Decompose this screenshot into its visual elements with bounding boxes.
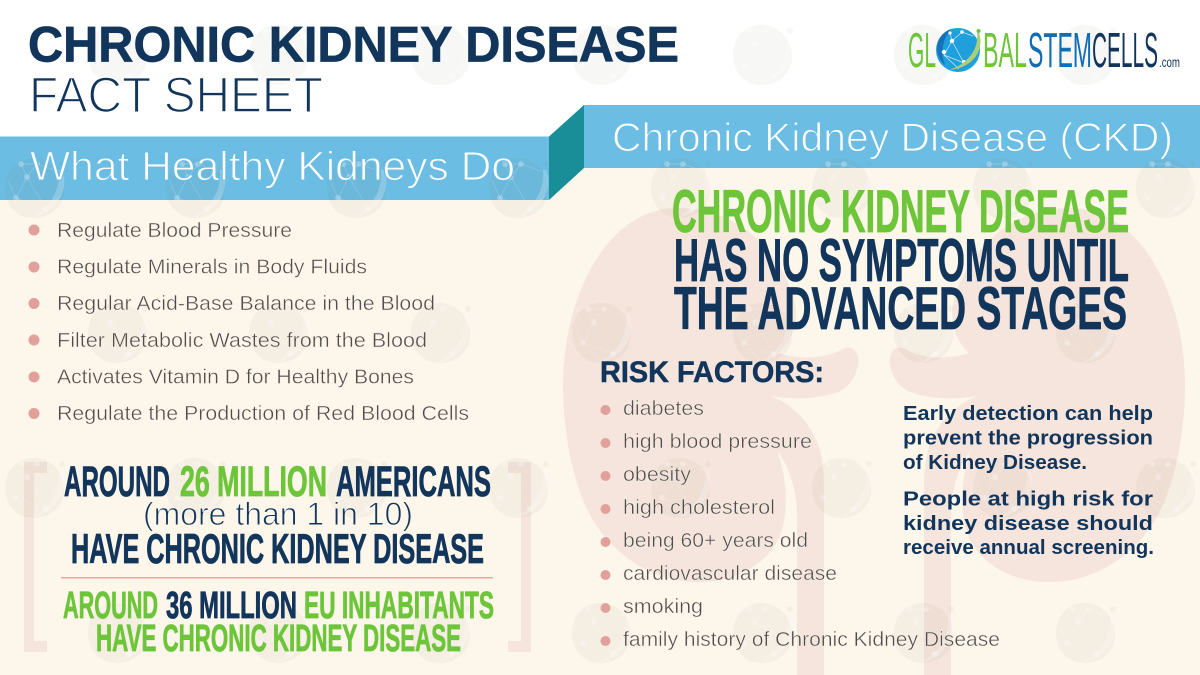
headline: no symptoms until advanced stages [672, 178, 1129, 342]
list: what healthy kidneys do: Regulate the Production of Red Blood Cells [57, 402, 469, 425]
kidney illustration background [563, 208, 1185, 675]
list: what healthy kidneys do: Activates Vitamin D for Healthy Bones [57, 366, 414, 388]
logo: Global Stem Cells: BAL [983, 24, 1027, 78]
ribbon band: What Healthy Kidneys Do [0, 136, 549, 200]
list: what healthy kidneys do: Regulate Blood Pressure [57, 219, 292, 242]
list: risk factors: diabetes [623, 397, 704, 420]
stat: 36 million EU inhabitants [63, 585, 494, 660]
logo: Global Stem Cells: GL [908, 24, 936, 78]
stat: 36 million EU inhabitants: EU INHABITANTS [304, 585, 494, 627]
callout: early detection: Early detection can help [903, 403, 1153, 425]
stat: 26 million Americans: (more than 1 in 10) [143, 496, 413, 532]
callout: annual screening [903, 488, 1154, 559]
background: cream page area below bands [0, 168, 1200, 675]
list: risk factors: smoking [623, 595, 703, 618]
list: what healthy kidneys do: Regular Acid-Base Balance in the Blood [57, 292, 435, 315]
heading: What Healthy Kidneys Do: What Healthy Kidneys Do [30, 143, 515, 189]
list: what healthy kidneys do [28, 219, 469, 425]
stat: 26 million Americans: AROUND [64, 458, 170, 506]
callout: annual screening: kidney disease should [903, 513, 1153, 535]
stats bracket: right [508, 462, 531, 652]
title: FACT SHEET [29, 67, 323, 123]
list: risk factors: family history of Chronic Kidney Disease [623, 628, 1000, 651]
list: what healthy kidneys do: Regulate Minerals in Body Fluids [57, 256, 367, 278]
stat: 26 million Americans: AMERICANS [336, 458, 491, 506]
title [28, 16, 679, 123]
logo: Global Stem Cells: .com [1159, 54, 1180, 70]
list: risk factors: high blood pressure [623, 430, 812, 453]
ribbon band: Chronic Kidney Disease [584, 105, 1200, 168]
callout: early detection: prevent the progression [903, 428, 1153, 450]
logo: Global Stem Cells [908, 24, 1180, 78]
heading: risk factors: RISK FACTORS: [600, 356, 824, 389]
list: what healthy kidneys do: Filter Metabolic Wastes from the Blood [57, 329, 427, 352]
list: risk factors: obesity [623, 463, 692, 486]
stat: 36 million EU inhabitants: HAVE CHRONIC KIDNEY DISEASE [96, 618, 461, 660]
list: risk factors: cardiovascular disease [623, 562, 837, 585]
callout: annual screening: receive annual screening. [903, 537, 1154, 559]
icon: logo globe [936, 28, 981, 72]
list: risk factors: being 60+ years old [623, 529, 808, 552]
stats bracket: left [24, 462, 47, 652]
callout: early detection: of Kidney Disease. [903, 452, 1087, 474]
stat: 26 million Americans: HAVE CHRONIC KIDNEY DISEASE [71, 525, 484, 572]
list: risk factors [600, 397, 1000, 651]
callout: annual screening: People at high risk for [903, 488, 1153, 510]
heading: Chronic Kidney Disease (CKD): Chronic Kidney Disease (CKD) [612, 116, 1173, 160]
stat: 26 million Americans [64, 458, 491, 572]
callout: early detection [903, 403, 1153, 474]
logo: Global Stem Cells: STEM [1028, 24, 1092, 78]
title: CHRONIC KIDNEY DISEASE [28, 16, 679, 72]
list: risk factors: high cholesterol [623, 496, 775, 519]
ribbon fold connector [549, 105, 584, 200]
stat: 26 million Americans: 26 MILLION [180, 458, 327, 506]
stat: 36 million EU inhabitants: AROUND [63, 585, 158, 627]
stat: 36 million EU inhabitants: 36 MILLION [166, 585, 297, 627]
